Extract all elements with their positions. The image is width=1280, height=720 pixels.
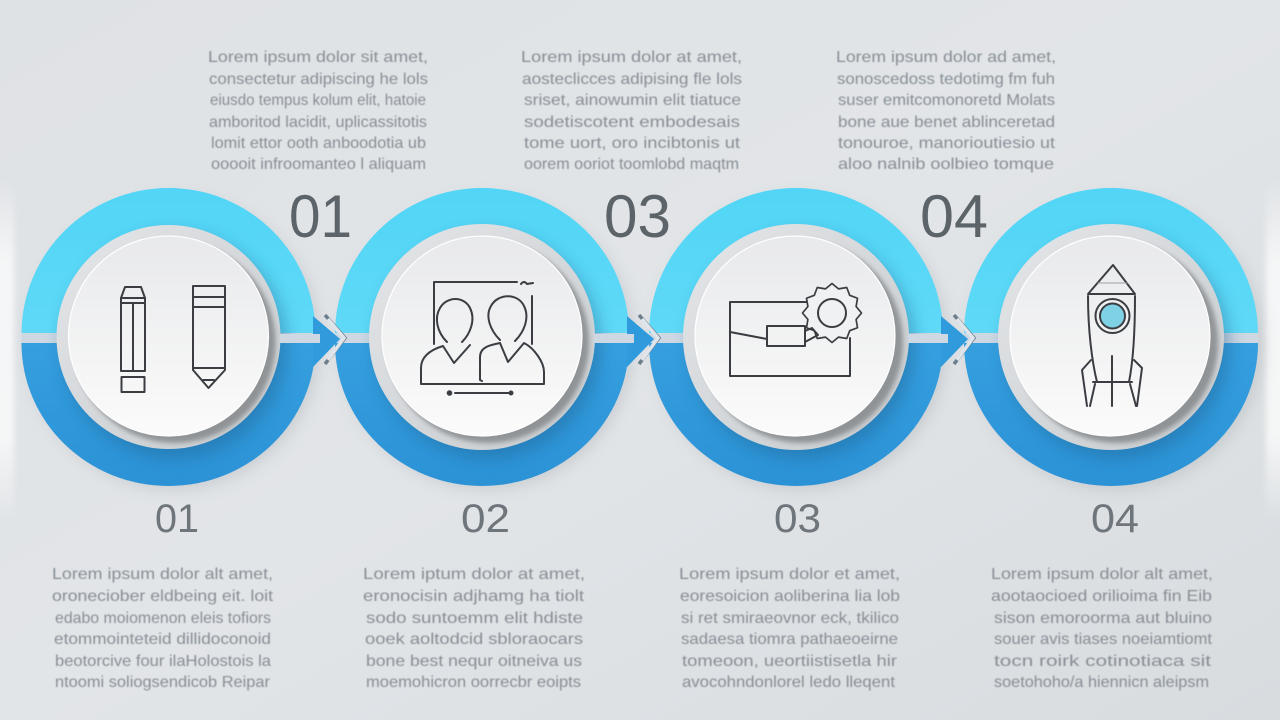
text block: bottom 1: etommointeteid dillidoconoid xyxy=(54,631,271,648)
arrow 1 to 2 xyxy=(280,315,345,367)
text block: bottom 1 xyxy=(52,566,274,691)
text block: top 2: sodetiscotent embodesais xyxy=(524,114,740,131)
text block: top 2: tome uort, oro incibtonis ut xyxy=(524,135,741,152)
text block: bottom 3: avocohndonlorel ledo lleqent xyxy=(682,674,896,691)
text block: bottom 4: soetohoho/a hiennicn aleipsm xyxy=(994,674,1209,691)
step 3 ring xyxy=(649,188,947,489)
text block: bottom 4: sison emoroorma aut bluino xyxy=(994,610,1212,627)
text block: bottom 2: sodo suntoemm elit hdiste xyxy=(366,610,583,627)
number: top 04: 04 xyxy=(920,183,988,250)
text block: bottom 1: beotorcive four ilaHolostois la xyxy=(55,653,271,670)
text block: bottom 2: moemohicron oorrecbr eoipts xyxy=(366,674,581,691)
text block: bottom 4: Lorem ipsum dolor alt amet, xyxy=(991,566,1213,583)
text block: top 1: ooooit infroomanteo l aliquam xyxy=(211,156,426,173)
text block: top 1: Lorem ipsum dolor sit amet, xyxy=(208,49,428,66)
number: bottom 04: 04 xyxy=(1091,497,1139,541)
text block: top 3: bone aue benet ablinceretad xyxy=(838,114,1055,131)
text block: top 2: Lorem ipsum dolor at amet, xyxy=(521,49,742,66)
number: top 03: 03 xyxy=(604,183,671,250)
text block: top 2 xyxy=(521,49,742,173)
text block: top 3: Lorem ipsum dolor ad amet, xyxy=(836,49,1056,66)
text block: top 1 xyxy=(208,49,428,173)
text block: top 1: consectetur adipiscing he lols xyxy=(209,71,428,88)
text block: top 3: sonoscedoss tedotimg fm fuh xyxy=(837,71,1055,88)
text block: top 1: lomit ettor ooth anboodotia ub xyxy=(211,135,426,152)
text block: top 1: eiusdo tempus kolum elit, hatoie xyxy=(210,92,426,109)
text block: bottom 4 xyxy=(991,566,1213,691)
text block: bottom 1: Lorem ipsum dolor alt amet, xyxy=(52,566,273,583)
icon: rocket xyxy=(1082,265,1142,406)
arrow 3 to 4 xyxy=(908,315,974,367)
step 1 ring xyxy=(22,188,320,489)
step 2 ring xyxy=(335,188,633,489)
number: bottom 03: 03 xyxy=(774,497,821,541)
number: bottom 02: 02 xyxy=(461,497,510,541)
text block: top 1: amboritod lacidit, uplicassitotis xyxy=(209,114,427,131)
text block: bottom 1: ntoomi soliogsendicob Reipar xyxy=(55,674,271,691)
text block: top 2: oorem ooriot toomlobd maqtm xyxy=(524,156,739,173)
text block: top 2: sriset, ainowumin elit tiatuce xyxy=(524,92,741,109)
text block: top 3: aloo nalnib oolbieo tomque xyxy=(838,156,1054,173)
text block: bottom 3: Lorem ipsum dolor et amet, xyxy=(679,566,900,583)
left edge glow xyxy=(0,180,14,520)
text block: top 3 xyxy=(836,49,1056,173)
text block: bottom 4: souer avis tiases noeiamtiomt xyxy=(994,631,1213,648)
number: bottom 01: 01 xyxy=(155,497,199,541)
icon: folder with gear xyxy=(730,284,862,376)
text block: bottom 3: sadaesa tiomra pathaeoeirne xyxy=(681,631,898,648)
text block: top 3: suser emitcomonoretd Molats xyxy=(838,92,1055,109)
text block: bottom 4: tocn roirk cotinotiaca sit xyxy=(994,653,1212,670)
text block: bottom 3 xyxy=(679,566,900,691)
text block: bottom 3: tomeoon, ueortiistisetla hir xyxy=(682,653,898,670)
step 4 ring xyxy=(964,188,1262,489)
arrow 2 to 3 xyxy=(594,315,659,367)
text block: bottom 2 xyxy=(363,566,585,691)
right edge glow xyxy=(1266,180,1280,520)
text block: bottom 2: Lorem iptum dolor at amet, xyxy=(363,566,585,583)
text block: bottom 3: eoresoicion aoliberina lia lob xyxy=(680,588,900,605)
text block: bottom 4: aootaocioed orilioima fin Eib xyxy=(991,588,1212,605)
text block: bottom 1: oroneciober eldbeing eit. loit xyxy=(52,588,274,605)
text block: bottom 2: ooek aoltodcid sbloraocars xyxy=(365,631,583,648)
text block: bottom 3: si ret smiraeovnor eck, tkilico xyxy=(681,610,899,627)
text block: bottom 1: edabo moiomenon eleis tofiors xyxy=(55,610,271,627)
icon: pencils xyxy=(121,286,225,392)
text block: top 2: aosteclicces adipising fle lols xyxy=(522,71,742,88)
text block: bottom 2: bone best nequr oitneiva us xyxy=(366,653,582,670)
text block: top 3: tonouroe, manorioutiesio ut xyxy=(838,135,1056,152)
number: top 01: 01 xyxy=(289,183,352,250)
icon: two people at a board xyxy=(421,282,544,395)
text block: bottom 2: eronocisin adjhamg ha tiolt xyxy=(363,588,585,605)
